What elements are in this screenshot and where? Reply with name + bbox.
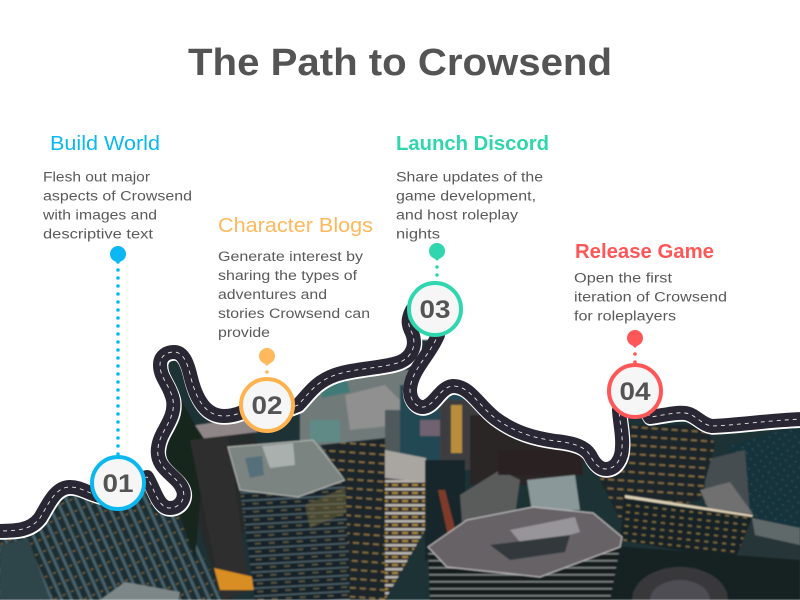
white tower [384,478,426,599]
left tower [0,491,222,600]
marker 02 [241,379,293,431]
right corner roof [738,520,800,559]
description 03: nights [396,226,440,242]
pin and dots 03 [429,243,445,277]
right low block [621,498,752,555]
dome [632,567,728,600]
lower centre building body [428,547,620,600]
description 03 [396,170,543,242]
description 01 [42,170,192,242]
description 02: provide [218,325,270,340]
marker 01 [92,457,144,509]
pin and dot 02 [259,348,275,374]
marker 04 [609,365,661,417]
low grey blocks [460,470,520,522]
heading: Release Game: Release Game [575,241,714,263]
marker 01: 01 [102,470,134,498]
description 04: Open the first [574,270,672,286]
marker 03 [409,283,461,335]
description 03: game development, [396,188,536,204]
description 03: Share updates of the [396,170,543,184]
bottom left roof [100,582,180,600]
distant buildings [300,370,570,485]
dark tower with rooftop [198,434,256,600]
central tower body [240,478,352,600]
heading: Character Blogs: Character Blogs [218,215,373,237]
step 03: Launch Discord [396,133,549,335]
step 02: Character Blogs [218,215,373,431]
description 02: Generate interest by [218,249,363,264]
lower centre building roof [428,507,622,577]
marker 03: 03 [420,296,450,324]
corner block [0,538,50,600]
description 01: aspects of Crowsend [43,188,192,204]
description 04 [574,270,727,324]
description 03: and host roleplay [396,208,518,222]
description 04: for roleplayers [574,308,676,324]
title: The Path to Crowsend [188,42,612,84]
city skyline photo [0,340,800,600]
far right dark tower [732,430,800,528]
description 02 [218,249,370,340]
marker 04: 04 [620,378,651,406]
pin and dots 04 [627,330,643,364]
road [0,309,800,532]
description 01: with images and [42,208,157,222]
tower with amber windows [600,425,715,520]
description 01: Flesh out major [43,170,151,184]
step 04: Release Game [574,241,727,417]
description 02: stories Crowsend can [218,306,370,321]
marker 02: 02 [252,392,282,420]
description 01: descriptive text [43,226,153,242]
pin and dotted line 01 [110,246,126,456]
heading: Launch Discord: Launch Discord [396,133,549,155]
description 02: adventures and [218,287,327,302]
description 04: iteration of Crowsend [574,290,727,304]
step 01: Build World [42,133,192,509]
central tower roof [228,440,345,497]
heading: Build World: Build World [50,133,160,155]
orange street glow [214,568,258,590]
description 02: sharing the types of [218,268,357,283]
tower right of centre [320,438,387,600]
